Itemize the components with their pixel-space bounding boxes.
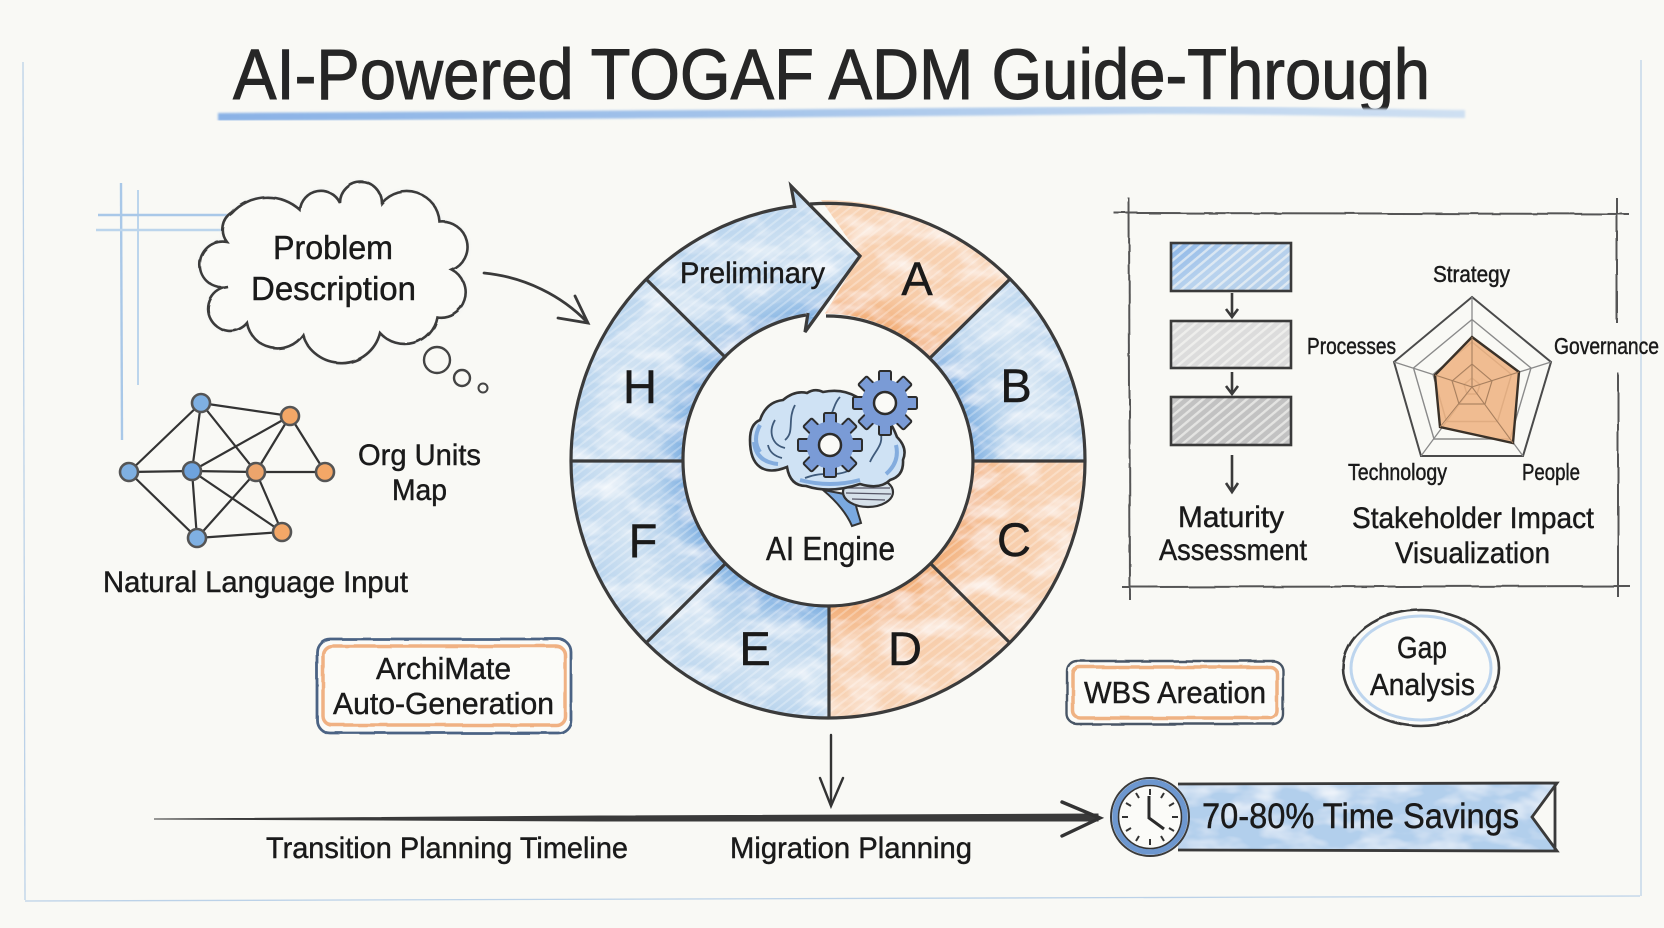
arrow: wheel down to timeline: [820, 735, 843, 806]
pencil hatch over the ring: [571, 204, 1085, 718]
thought cloud: Problem Description: [200, 182, 488, 392]
label: Org Units Map: Map: [392, 474, 447, 507]
stakeholder label: Visualization: [1395, 537, 1550, 570]
phase labels: H: [623, 360, 657, 413]
radar labels: Strategy: [1433, 261, 1510, 287]
cloud text: Description: [251, 270, 416, 307]
box text: WBS Areation: [1084, 675, 1266, 710]
network nodes: [120, 394, 334, 547]
Preliminary label: Preliminary: [680, 257, 825, 290]
label: Transition Planning Timeline: Transition Planning Timeline: [266, 832, 628, 865]
title: AI-Powered TOGAF ADM Guide-Through: [233, 36, 1430, 115]
box: ArchiMate Auto-Generation: [317, 639, 571, 733]
ellipse text: Gap: [1397, 630, 1447, 665]
phase labels: A: [901, 252, 933, 305]
ellipse text: Analysis: [1370, 667, 1475, 702]
timeline arrow: [154, 802, 1100, 836]
ellipse: Gap Analysis: [1343, 610, 1499, 726]
phase labels: D: [888, 622, 922, 675]
AI Engine label: AI Engine: [766, 530, 895, 567]
maturity label: Assessment: [1159, 534, 1308, 567]
label: Org Units Map: Org Units: [358, 439, 481, 472]
right panel: maturity and stakeholder: [1114, 198, 1659, 600]
radar labels: Processes: [1307, 333, 1396, 359]
radar chart: [1394, 297, 1551, 456]
icon: clock: [1111, 778, 1189, 856]
segments: orange phases: [821, 200, 1085, 718]
phase labels: C: [997, 513, 1031, 566]
cloud text: [251, 229, 416, 307]
radar labels: People: [1522, 459, 1580, 485]
phase labels: F: [629, 514, 657, 567]
ADM cycle wheel: [571, 186, 1085, 718]
segments: blue phases: [571, 186, 1085, 718]
maturity label: [1159, 501, 1308, 567]
icon: AI brain with gears: [750, 371, 917, 526]
box text: ArchiMate: [376, 651, 511, 686]
radar labels: [1307, 261, 1659, 485]
phase labels: E: [739, 622, 771, 675]
label: Org Units Map: [358, 439, 481, 507]
cloud text: Problem: [273, 229, 393, 266]
maturity flow: [1171, 243, 1291, 492]
network diagram: org units map: [120, 394, 334, 547]
radar labels: Technology: [1348, 459, 1447, 485]
thought bubbles: [424, 347, 488, 392]
label: Natural Language Input: Natural Language Input: [103, 566, 409, 599]
stakeholder label: Stakeholder Impact: [1352, 502, 1595, 535]
banner: 70-80% Time Savings: [1178, 783, 1557, 851]
sketched frame: [1114, 198, 1630, 600]
maturity label: Maturity: [1178, 501, 1284, 534]
wheel outlines and dividers: [571, 186, 1085, 718]
stakeholder label: [1352, 502, 1595, 570]
label: Migration Planning: Migration Planning: [730, 832, 972, 865]
arrow: cloud to wheel: [484, 273, 588, 323]
title underline: [218, 110, 1465, 117]
box text: Auto-Generation: [333, 686, 554, 721]
banner text: 70-80% Time Savings: [1202, 797, 1519, 836]
phase labels: B: [1000, 359, 1032, 412]
box: WBS Areation: [1067, 661, 1283, 724]
ellipse text: [1370, 630, 1475, 702]
box text: [333, 651, 554, 721]
phase labels: [623, 252, 1032, 675]
